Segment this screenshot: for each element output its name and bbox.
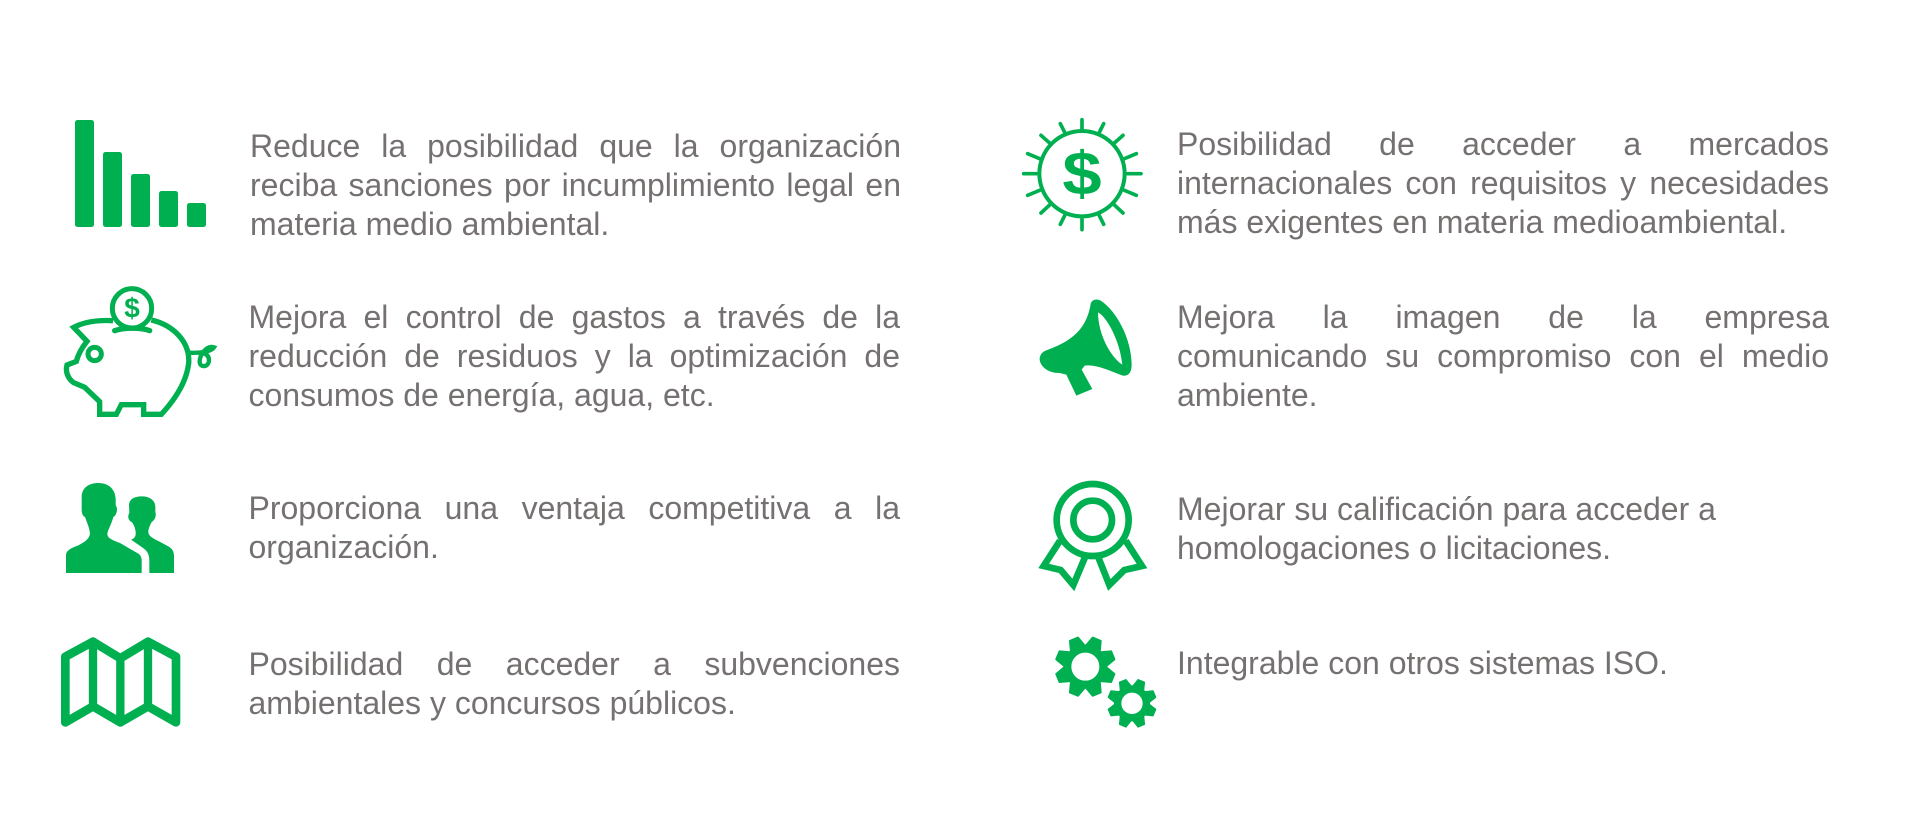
icon: award rosette bbox=[1038, 480, 1148, 592]
text: sanciones: materia medio ambiental. bbox=[250, 206, 609, 242]
text: homologaciones: Mejorar su calificación para acceder a bbox=[1177, 491, 1716, 527]
text: sanciones bbox=[250, 128, 901, 242]
icon: gears bbox=[1055, 636, 1156, 728]
text: imagen de la empresa bbox=[1177, 299, 1830, 413]
text: sanciones: reciba sanciones por incumplimiento legal en bbox=[250, 167, 901, 203]
text: subvenciones bbox=[248, 646, 900, 721]
text: imagen de la empresa: comunicando su compromiso con el medio bbox=[1177, 338, 1829, 374]
text: control de gastos: reducción de residuos y la optimización de bbox=[248, 338, 900, 374]
text: ventaja competitiva: Proporciona una ventaja competitiva a la bbox=[248, 490, 900, 526]
text: control de gastos bbox=[248, 299, 900, 413]
text: homologaciones bbox=[1177, 491, 1716, 566]
text: mercados internacionales: más exigentes en materia medioambiental. bbox=[1177, 204, 1787, 240]
text: sanciones: Reduce la posibilidad que la organización bbox=[250, 128, 901, 164]
icon text: coin dollar: $ bbox=[125, 292, 141, 323]
icon: piggy bank bbox=[64, 286, 218, 417]
icon: descending bar chart bbox=[75, 120, 206, 227]
text: homologaciones: homologaciones o licitaciones. bbox=[1177, 530, 1611, 566]
icon: megaphone bbox=[1040, 300, 1132, 396]
text: sistemas ISO: Integrable con otros sistemas ISO. bbox=[1177, 645, 1668, 681]
icon: folded map bbox=[61, 637, 180, 727]
text: mercados internacionales: Posibilidad de acceder a mercados bbox=[1177, 126, 1829, 162]
icon: two people bbox=[66, 483, 174, 573]
text: imagen de la empresa: Mejora la imagen de la empresa bbox=[1177, 299, 1829, 335]
text: mercados internacionales: internacionales con requisitos y necesidades bbox=[1177, 165, 1829, 201]
text: imagen de la empresa: ambiente. bbox=[1177, 377, 1318, 413]
icon: dollar sun bbox=[1022, 118, 1143, 232]
text: subvenciones: ambientales y concursos públicos. bbox=[248, 685, 736, 721]
text: ventaja competitiva bbox=[248, 490, 900, 565]
text: mercados internacionales bbox=[1177, 126, 1829, 240]
text: subvenciones: Posibilidad de acceder a subvenciones bbox=[248, 646, 900, 682]
text: control de gastos: consumos de energía, agua, etc. bbox=[248, 377, 715, 413]
text: control de gastos: Mejora el control de gastos a través de la bbox=[248, 299, 900, 335]
text: ventaja competitiva: organización. bbox=[248, 529, 439, 565]
icon text: dollar sign: $ bbox=[1062, 139, 1101, 208]
